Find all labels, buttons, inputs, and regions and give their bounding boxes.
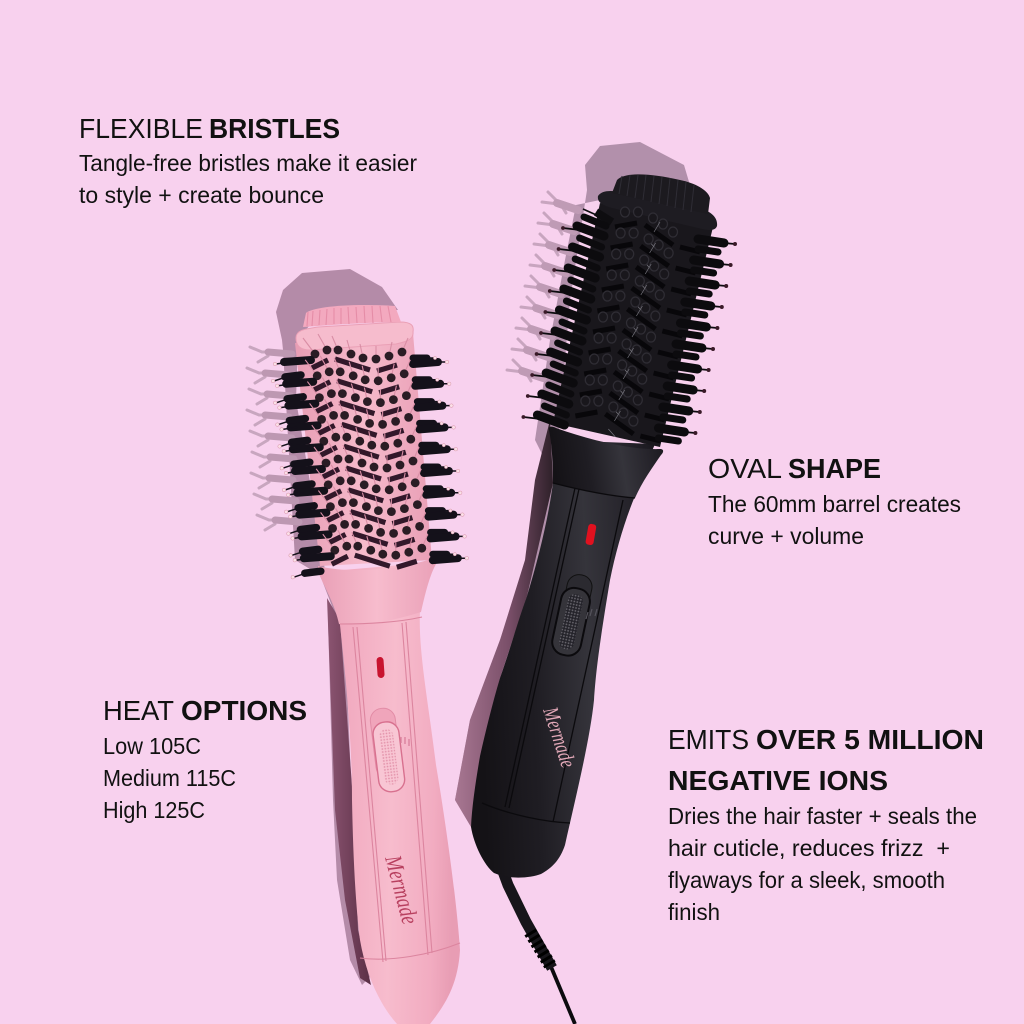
- body text: to style + create bounce: [79, 182, 324, 208]
- body text: flyaways for a sleek, smooth: [668, 867, 945, 893]
- pink barrel: [295, 333, 432, 566]
- heading: FLEXIBLE: [79, 113, 203, 144]
- black cap: [612, 174, 710, 214]
- pink logo: Mermade: [379, 852, 423, 927]
- black handle lines: [482, 483, 635, 823]
- body text: hair cuticle, reduces frizz +: [668, 835, 950, 861]
- callout: flexible bristles: [79, 113, 417, 208]
- pink switch: [369, 707, 406, 793]
- pink LED: [376, 657, 385, 678]
- body text: High 125C: [103, 797, 205, 823]
- body text: curve + volume: [708, 523, 864, 549]
- heading: OVAL: [708, 453, 782, 484]
- callout: oval shape: [708, 453, 961, 549]
- black brush shadow: [455, 142, 692, 830]
- pink handle lines: [340, 617, 460, 962]
- body text: Tangle-free bristles make it easier: [79, 150, 417, 176]
- black barrel rim: [598, 191, 717, 230]
- pink brush: [271, 305, 469, 1024]
- pink cord: [410, 1015, 412, 1024]
- heading: OVER 5 MILLION: [756, 724, 984, 755]
- pink cap: [303, 305, 401, 327]
- body text: Low 105C: [103, 733, 201, 759]
- callout: heat options: [103, 695, 307, 823]
- body text: [708, 491, 961, 549]
- black LED: [585, 523, 597, 546]
- heading: HEAT: [103, 695, 174, 726]
- body text: [103, 733, 236, 823]
- heading: EMITS: [668, 724, 749, 755]
- heading: [708, 453, 881, 484]
- black neck collar: [549, 427, 663, 498]
- pink cap collar: [296, 322, 413, 350]
- black bristle rows: [522, 207, 737, 441]
- callout: negative ions: [668, 724, 984, 925]
- pink bristle rows: [271, 334, 469, 579]
- body text: Dries the hair faster + seals the: [668, 803, 977, 829]
- pink handle: [320, 562, 460, 1024]
- black cord: [497, 855, 575, 1024]
- body text: [79, 150, 417, 208]
- body text: Medium 115C: [103, 765, 236, 791]
- pink brush shadow: [276, 269, 398, 985]
- body text: finish: [668, 899, 720, 925]
- pink bristle shadows: [247, 347, 299, 530]
- heading: NEGATIVE IONS: [668, 765, 888, 796]
- black switch ticks: [586, 609, 597, 619]
- heading: OPTIONS: [181, 695, 307, 726]
- black logo: Mermade: [538, 703, 581, 771]
- body text: The 60mm barrel creates: [708, 491, 961, 517]
- heading: [79, 113, 340, 144]
- black handle: [471, 440, 655, 878]
- black bristle shadows: [507, 192, 578, 381]
- heading: [668, 724, 984, 796]
- black brush: [471, 174, 737, 1024]
- pink switch ticks: [401, 737, 409, 746]
- pink base collar: [318, 558, 436, 624]
- heading: SHAPE: [788, 453, 881, 484]
- body text: [668, 803, 977, 925]
- heading: [103, 695, 307, 726]
- heading: BRISTLES: [209, 113, 340, 144]
- black barrel: [553, 203, 713, 447]
- black switch: [550, 572, 595, 658]
